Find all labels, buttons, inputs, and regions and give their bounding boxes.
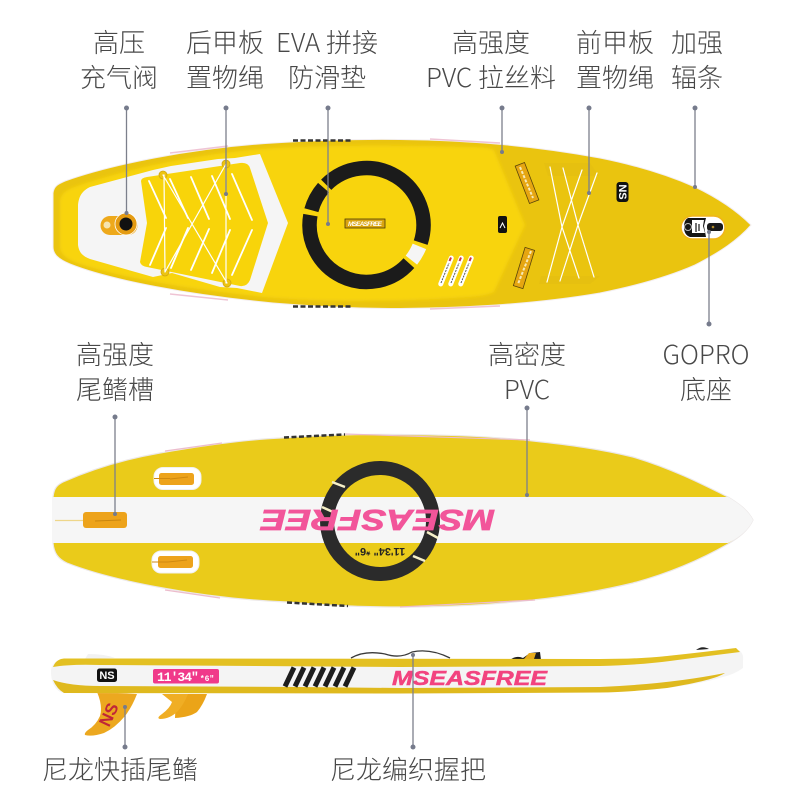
pink wordmark: MSEASFREE [392, 668, 548, 690]
label: EVA pad: EVA 拼接 [276, 23, 378, 60]
side fins [162, 694, 207, 718]
size badge: 11'34"*6" [157, 670, 214, 685]
centre fin box [55, 512, 127, 528]
ring breaks [322, 482, 438, 561]
label: PVC drop-stitch: PVC 拉丝料 [426, 58, 556, 95]
label: front deck bungee: 置物绳 [576, 58, 654, 95]
upper side fin box [154, 468, 201, 490]
stripe marks on rail [293, 140, 353, 306]
leader: rear deck bungee [224, 106, 228, 196]
centre carry handle [345, 219, 385, 228]
size text: 11'34" *6" [355, 545, 405, 557]
board: side view [51, 647, 743, 736]
rear bungee anchors [159, 160, 231, 287]
label: EVA pad: 防滑垫 [288, 58, 366, 95]
lower side fin box [152, 551, 199, 573]
hull outline [53, 139, 751, 308]
board: top view [53, 139, 751, 309]
leader: valve [124, 106, 129, 215]
board: underside view [52, 434, 753, 607]
leader: fin groove [112, 414, 118, 516]
deck gear [85, 654, 115, 659]
main fin [85, 692, 137, 736]
top yellow band [53, 648, 740, 667]
ring graphic [327, 468, 433, 574]
leader: nylon handle [410, 653, 416, 750]
label: GoPro mount: GOPRO [663, 335, 749, 372]
logo sticker [498, 216, 507, 233]
centre carry handle: MSEASFREE [348, 221, 383, 228]
label: reinforcement strip: 加强 [671, 23, 723, 60]
front bungee cords [547, 167, 597, 282]
tail pad: white chevron [78, 154, 288, 293]
leader: high density PVC [524, 406, 530, 497]
label: front deck bungee: 前甲板 [576, 23, 654, 60]
main fin: NS [95, 700, 123, 729]
front side handles [513, 163, 539, 289]
label: high density PVC: PVC [504, 370, 550, 407]
NS badge [97, 668, 117, 682]
NS badge: NS [616, 184, 628, 200]
label: GoPro mount: 底座 [680, 370, 732, 407]
tail pad groove lines [149, 174, 252, 275]
black hatch [285, 668, 354, 686]
bright deck [60, 146, 525, 301]
hull [51, 648, 743, 694]
ring graphic [310, 168, 423, 282]
white centre stripe [52, 497, 753, 543]
label: fin groove: 尾鳍槽 [76, 370, 154, 407]
label: nylon handle: 尼龙编织握把 [330, 750, 486, 787]
bottom yellow band [53, 673, 725, 694]
label: PVC drop-stitch: 高强度 [452, 23, 530, 60]
label: rear deck bungee: 后甲板 [186, 23, 264, 60]
valve [100, 213, 138, 235]
rail marks [284, 434, 348, 606]
leader: nylon fin [122, 705, 128, 750]
leader: GoPro mount [706, 230, 712, 326]
label: fin groove: 高强度 [76, 335, 154, 372]
label: valve: 充气阀 [80, 58, 158, 95]
leader: EVA pad [326, 106, 330, 226]
label: valve: 高压 [93, 23, 145, 60]
label: high density PVC: 高密度 [488, 335, 566, 372]
label: rear deck bungee: 置物绳 [186, 58, 264, 95]
GoPro mount [681, 216, 725, 239]
small stickers [438, 255, 474, 287]
front bungee pads [539, 163, 600, 284]
leader: PVC drop-stitch [500, 106, 504, 154]
tail pad: yellow inset [140, 163, 268, 286]
label: nylon fin: 尼龙快插尾鳍 [42, 750, 198, 787]
label: reinforcement strip: 辐条 [671, 58, 723, 95]
NS badge: NS [99, 670, 115, 682]
pink wordmark: MSEASFREE [259, 503, 495, 535]
rear bungee cords [163, 164, 227, 283]
leader: front deck bungee [586, 106, 592, 195]
hull outline [53, 434, 753, 607]
leader: reinforcement strip [692, 106, 698, 189]
